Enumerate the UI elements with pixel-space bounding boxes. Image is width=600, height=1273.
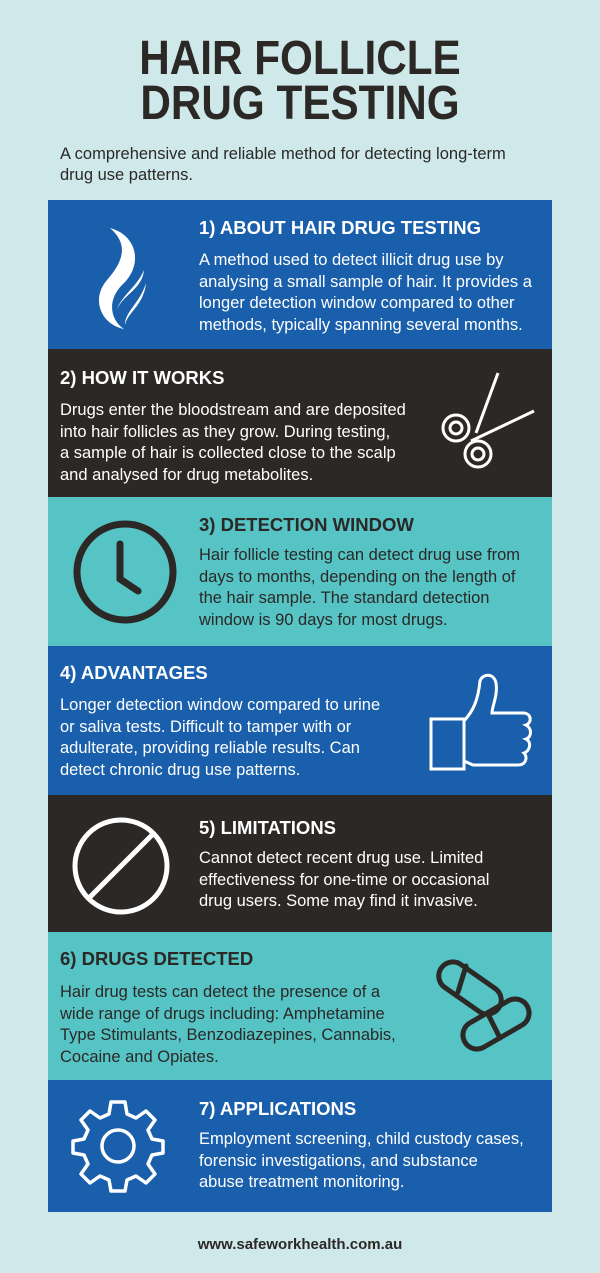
text: Longer detection window compared to urine [60, 696, 380, 714]
text: and analysed for drug metabolites. [60, 466, 313, 484]
panel: how it works [48, 349, 552, 497]
text: the hair sample. The standard detection [199, 589, 489, 607]
subtitle [60, 145, 506, 184]
panel: advantages [48, 646, 552, 795]
icon: prohibited [72, 818, 170, 914]
text: Hair drug tests can detect the presence of a [60, 983, 380, 1001]
heading: 2) HOW IT WORKS [60, 367, 224, 388]
panel: limitations [48, 795, 552, 932]
text: Hair follicle testing can detect drug use from [199, 546, 520, 564]
panel: applications [48, 1080, 552, 1212]
text [199, 251, 532, 334]
text: window is 90 days for most drugs. [199, 610, 448, 628]
footer url: www.safeworkhealth.com.au [198, 1236, 402, 1253]
heading: 7) APPLICATIONS [199, 1098, 356, 1119]
heading: 4) ADVANTAGES [60, 662, 208, 683]
icon: capsules [436, 959, 532, 1052]
subtitle: A comprehensive and reliable method for detecting long-term [60, 145, 506, 163]
text: a sample of hair is collected close to the scalp [60, 444, 396, 462]
text: effectiveness for one-time or occasional [199, 870, 489, 888]
text: abuse treatment monitoring. [199, 1173, 404, 1191]
text [60, 401, 406, 484]
panel: drugs detected [48, 932, 552, 1080]
text: A method used to detect illicit drug use by [199, 251, 504, 269]
text: days to months, depending on the length of [199, 568, 515, 586]
heading: 5) LIMITATIONS [199, 817, 336, 838]
panel: about [48, 200, 552, 349]
text: Type Stimulants, Benzodiazepines, Cannabis, [60, 1026, 396, 1044]
text: Cocaine and Opiates. [60, 1048, 219, 1066]
text: longer detection window compared to other [199, 294, 515, 312]
text: analysing a small sample of hair. It provides a [199, 272, 532, 290]
text [199, 849, 489, 910]
icon: hair [98, 228, 146, 329]
title: DRUG TESTING [140, 77, 460, 130]
icon: clock [74, 520, 176, 624]
text: forensic investigations, and substance [199, 1152, 478, 1170]
text: Cannot detect recent drug use. Limited [199, 849, 483, 867]
heading: 1) ABOUT HAIR DRUG TESTING [199, 217, 481, 238]
text: detect chronic drug use patterns. [60, 760, 300, 778]
text: Employment screening, child custody cases, [199, 1130, 524, 1148]
icon: scissors [442, 372, 535, 468]
panel: detection window [48, 497, 552, 646]
text [199, 546, 520, 628]
heading: 3) DETECTION WINDOW [199, 514, 414, 535]
text: wide range of drugs including: Amphetamine [60, 1004, 385, 1022]
icon: thumbs up [430, 674, 532, 770]
text [60, 696, 380, 778]
text: or saliva tests. Difficult to tamper with or [60, 718, 351, 736]
text: drug users. Some may find it invasive. [199, 892, 478, 910]
title [139, 32, 461, 130]
text: adulterate, providing reliable results. Can [60, 739, 360, 757]
text [60, 983, 396, 1066]
subtitle: drug use patterns. [60, 166, 193, 184]
title: HAIR FOLLICLE [139, 32, 461, 85]
text: Drugs enter the bloodstream and are deposited [60, 401, 406, 419]
icon: gear [71, 1100, 165, 1193]
text: methods, typically spanning several months. [199, 316, 523, 334]
text [199, 1130, 524, 1191]
text: into hair follicles as they grow. During testing, [60, 422, 390, 440]
heading: 6) DRUGS DETECTED [60, 948, 253, 969]
